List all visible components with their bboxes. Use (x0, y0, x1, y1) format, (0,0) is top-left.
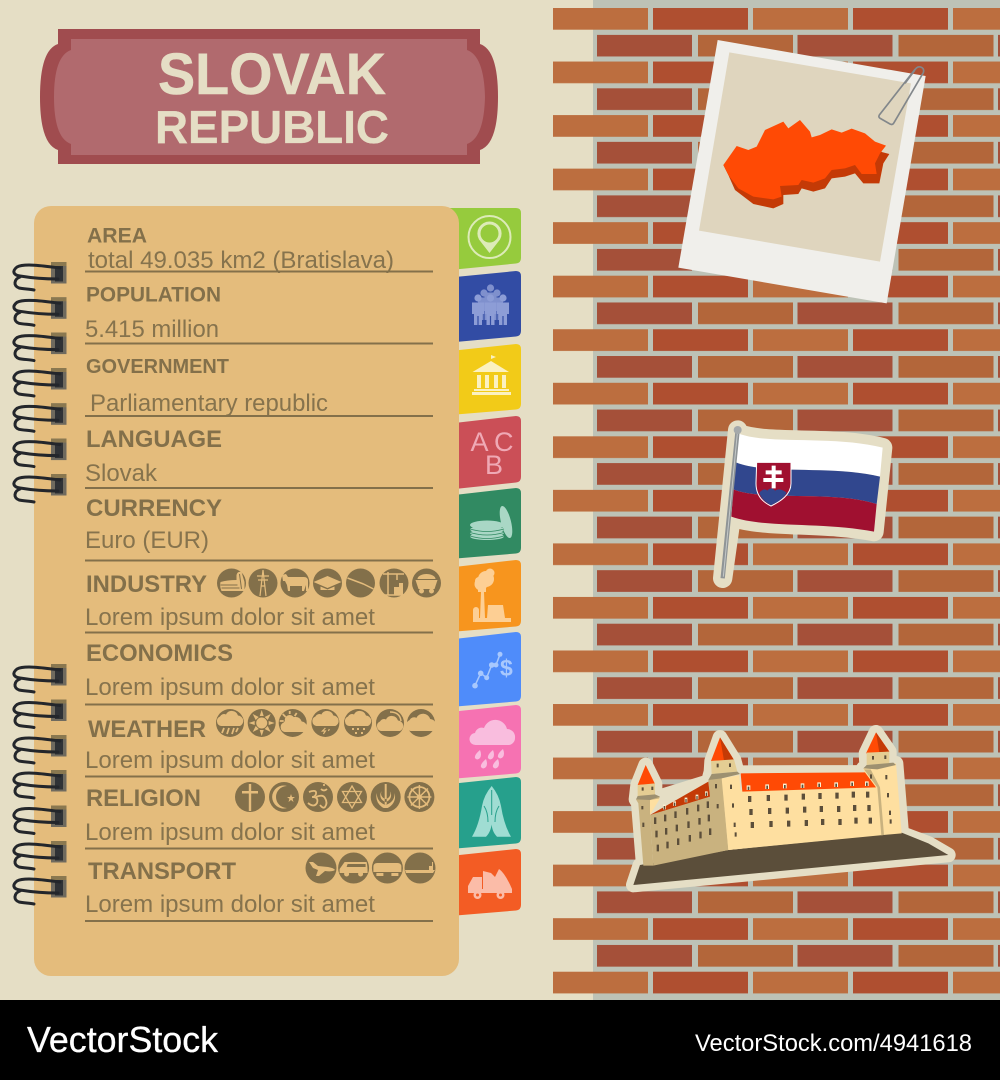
area row: total 49.035 km2 (Bratislava) (88, 247, 394, 274)
transport icons (306, 852, 436, 884)
government row: Parliamentary republic (90, 390, 328, 417)
industry icons (217, 568, 441, 598)
tab: religion (450, 777, 521, 849)
currency row: Euro (EUR) (85, 527, 209, 554)
tab: transport (450, 849, 521, 916)
tab: industry (450, 560, 521, 632)
area row (85, 224, 433, 274)
language row (85, 426, 433, 489)
castle roofs (636, 732, 896, 815)
brick wall (553, 0, 1000, 1000)
currency row: CURRENCY (86, 495, 222, 522)
tab: economics (450, 632, 521, 707)
area row: AREA (87, 224, 147, 248)
tab: area (450, 208, 521, 270)
religion row: Lorem ipsum dolor sit amet (85, 819, 375, 846)
religion row (85, 782, 434, 850)
tab: weather (450, 705, 521, 779)
photo frame (678, 40, 926, 303)
industry row: Lorem ipsum dolor sit amet (85, 604, 375, 631)
tab: population (450, 271, 521, 342)
transport row: TRANSPORT (88, 858, 236, 885)
weather icons (216, 709, 436, 737)
spiral binding top (14, 262, 66, 502)
population row (85, 284, 433, 344)
government row: GOVERNMENT (86, 356, 229, 378)
sticker outline (633, 732, 948, 885)
religion row: RELIGION (86, 785, 201, 812)
weather row (85, 709, 436, 778)
dormer panes (664, 783, 868, 809)
polaroid with map (678, 40, 926, 303)
population row: 5.415 million (85, 316, 219, 343)
language row: Slovak (85, 460, 158, 487)
coat of arms (756, 462, 791, 506)
economics row: ECONOMICS (86, 640, 233, 667)
tab: language: B (485, 450, 503, 480)
currency row (85, 495, 433, 562)
title: Republic: REPUBLIC (155, 101, 389, 153)
sticker outline (723, 430, 883, 578)
title banner (40, 29, 498, 164)
tab: language: C (494, 427, 514, 457)
photo area (699, 52, 911, 262)
flag sticker (723, 426, 883, 578)
paper clip (879, 67, 924, 124)
language row: LANGUAGE (86, 426, 222, 453)
weather row: Lorem ipsum dolor sit amet (85, 747, 375, 774)
tab: language (450, 416, 521, 490)
castle sticker (633, 732, 948, 885)
title: Slovak: SLOVAK (158, 42, 386, 107)
notebook panel (34, 206, 459, 976)
population row: POPULATION (86, 284, 221, 306)
economics row (85, 640, 433, 706)
transport row: Lorem ipsum dolor sit amet (85, 891, 375, 918)
spiral binding bottom (14, 664, 66, 904)
footer url: VectorStock.com/4941618 (695, 1030, 972, 1057)
category tabs (450, 208, 521, 916)
tab: economics: $ (500, 655, 513, 681)
tab: language: A (470, 427, 489, 457)
tab: government (450, 344, 521, 415)
footer bar (0, 1000, 1000, 1080)
government row (85, 356, 433, 417)
tab: currency (450, 488, 521, 559)
weather row: WEATHER (88, 716, 206, 743)
castle windows (641, 755, 892, 851)
transport row (85, 852, 436, 922)
castle hill (633, 833, 948, 885)
footer logo: VectorStock (27, 1019, 219, 1060)
religion icons (235, 782, 434, 812)
economics row: Lorem ipsum dolor sit amet (85, 674, 375, 701)
flag stripes (731, 433, 883, 532)
flag pole (723, 430, 738, 578)
map of Slovakia (723, 120, 889, 208)
industry row (85, 568, 441, 634)
castle walls (636, 763, 902, 866)
castle dormers (663, 781, 869, 809)
industry row: INDUSTRY (86, 571, 207, 598)
